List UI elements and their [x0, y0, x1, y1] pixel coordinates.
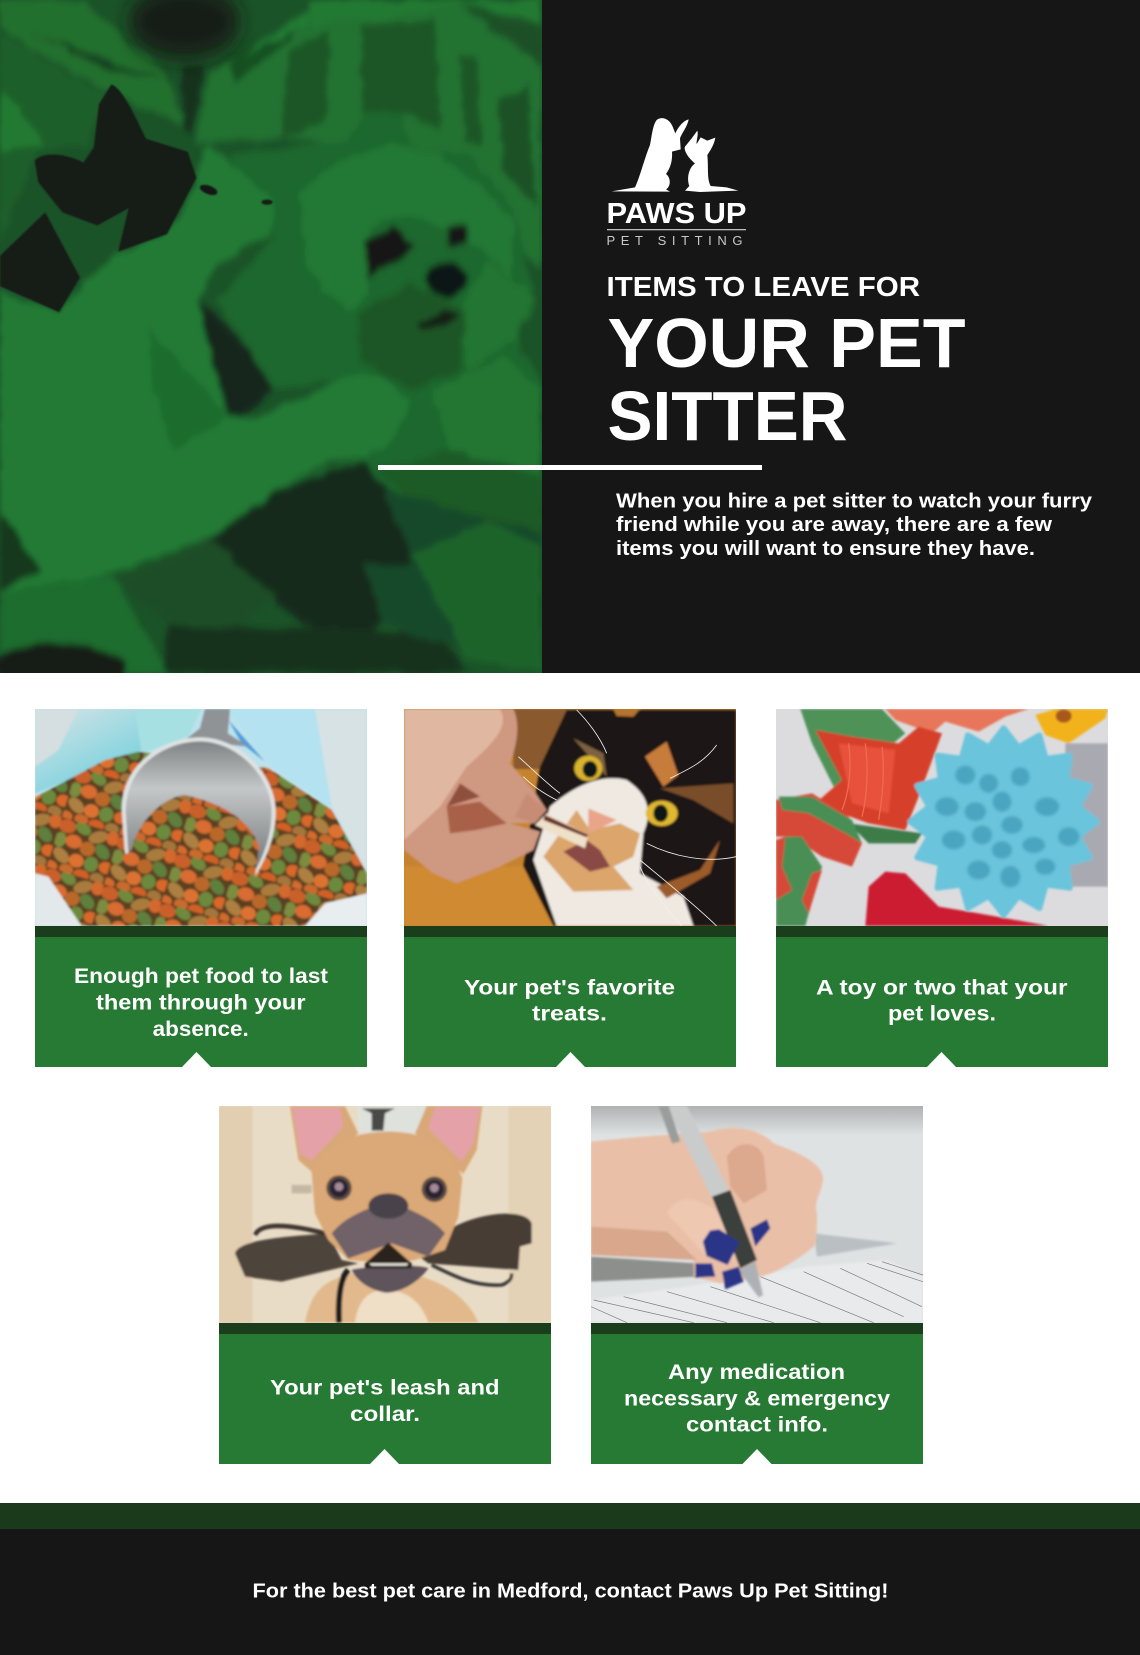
green caption box — [404, 937, 736, 1067]
caption text — [74, 964, 328, 1041]
footer — [0, 1503, 1140, 1655]
caption text: pet loves. — [888, 1002, 996, 1026]
panel: medication and emergency info card — [591, 1106, 923, 1464]
caption text: necessary & emergency — [624, 1386, 890, 1410]
dark band — [776, 926, 1108, 937]
notch arrow — [742, 1449, 772, 1464]
notch arrow — [556, 1052, 585, 1067]
caption text — [816, 976, 1068, 1026]
photo: cat eating a treat — [404, 709, 736, 926]
caption text — [464, 976, 675, 1026]
heading: your pet sitter — [608, 304, 966, 455]
caption text: contact info. — [686, 1413, 828, 1437]
logo tagline: PET SITTING — [606, 233, 742, 248]
heading: your pet sitter: SITTER — [608, 377, 848, 455]
caption text: Your pet's favorite — [464, 976, 675, 1000]
caption text: A toy or two that your — [816, 976, 1068, 1000]
dog face dark spots — [365, 225, 414, 282]
green caption box — [35, 937, 367, 1067]
caption text: Any medication — [668, 1360, 845, 1384]
panel: pet food card — [35, 709, 367, 1067]
logo wordmark: PAWS UP — [606, 198, 746, 230]
dark band — [591, 1323, 923, 1334]
panel: treats card — [404, 709, 736, 1067]
green caption box — [776, 937, 1108, 1067]
divider line across photo and panel — [378, 465, 762, 470]
notch arrow — [182, 1052, 211, 1067]
dog fur mass — [216, 115, 542, 538]
footer call to action: For the best pet care in Medford, contact Paws Up Pet Sitting! — [252, 1580, 888, 1602]
footer black panel — [0, 1529, 1140, 1655]
cat black markings — [0, 85, 273, 312]
footer green band — [0, 1503, 1140, 1529]
photo: hand writing on a form — [591, 1106, 923, 1323]
hero panel — [0, 0, 1140, 692]
notch arrow — [927, 1052, 956, 1067]
heading: your pet sitter: YOUR PET — [608, 304, 966, 382]
caption text: treats. — [532, 1002, 607, 1026]
caption text — [624, 1360, 890, 1437]
dark band — [404, 926, 736, 937]
caption text: Your pet's leash and — [270, 1376, 500, 1400]
logo: Paws Up Pet Sitting — [606, 118, 746, 248]
cat body — [0, 145, 410, 590]
panel: toy card — [776, 709, 1108, 1067]
panel: leash and collar card — [219, 1106, 551, 1464]
green caption box — [591, 1334, 923, 1464]
notch arrow — [370, 1449, 399, 1464]
intro paragraph: friend while you are away, there are a few — [616, 514, 1052, 536]
heading: items to leave for: ITEMS TO LEAVE FOR — [606, 271, 920, 302]
dark band — [219, 1323, 551, 1334]
caption text: absence. — [153, 1017, 249, 1041]
photo: kibble and scoop — [35, 709, 367, 926]
caption text — [270, 1376, 500, 1426]
intro paragraph: items you will want to ensure they have. — [616, 538, 1035, 560]
caption text: collar. — [350, 1402, 420, 1426]
photo: french bulldog holding a leash — [219, 1106, 551, 1323]
caption text: them through your — [96, 990, 306, 1014]
intro paragraph: When you hire a pet sitter to watch your furry — [616, 490, 1093, 512]
dark band — [35, 926, 367, 937]
intro paragraph — [616, 490, 1093, 560]
green caption box — [219, 1334, 551, 1464]
icon: dog and cat silhouette — [612, 118, 738, 192]
photo: dog toys — [776, 709, 1108, 926]
caption text: Enough pet food to last — [74, 964, 328, 988]
hero photo: cat and dog in green duotone — [0, 0, 542, 692]
